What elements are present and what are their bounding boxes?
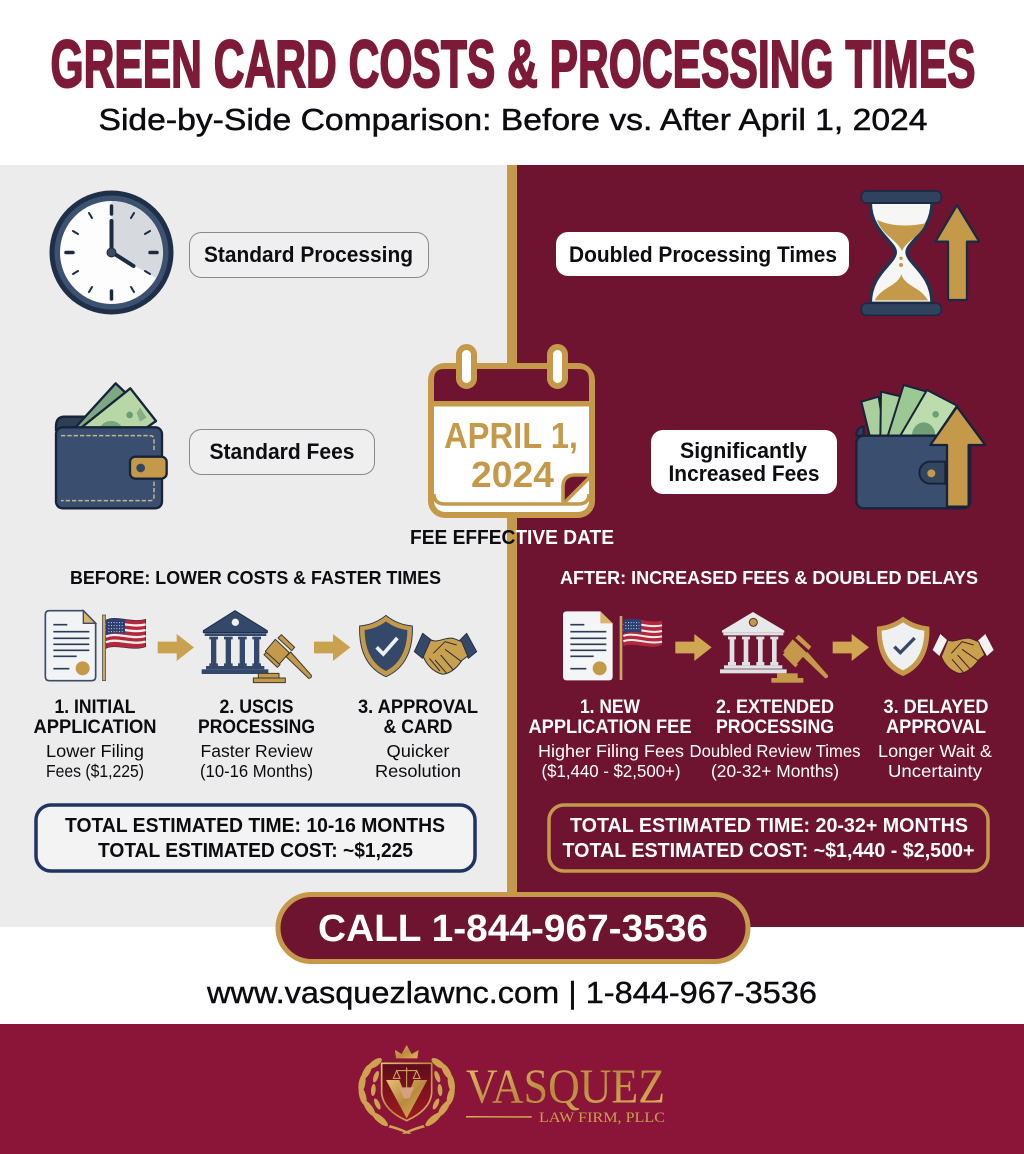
panel: after — [512, 165, 1024, 927]
after: step 3 text — [878, 696, 992, 781]
after totals box: TOTAL ESTIMATED COST: ~$1,440 - $2,500+ — [562, 840, 974, 862]
after totals box — [549, 805, 988, 871]
before: step 3 text — [358, 696, 478, 781]
after: step 1 text: APPLICATION FEE — [528, 716, 692, 738]
label: standard processing — [190, 232, 428, 278]
label: standard processing: Standard Processing — [204, 242, 413, 267]
before totals box: TOTAL ESTIMATED TIME: 10-16 MONTHS — [65, 815, 445, 837]
before: process icons — [45, 611, 477, 683]
icon: american flag — [620, 616, 662, 680]
before: step 3 text: Resolution — [375, 761, 461, 781]
before: step 2 text: Faster Review — [200, 741, 313, 761]
icon: shield with check — [877, 617, 929, 676]
icon: crown — [395, 1045, 419, 1058]
after: step 2 text: Doubled Review Times — [690, 741, 861, 761]
icon: handshake — [933, 634, 994, 673]
after: step 3 text: Uncertainty — [888, 761, 982, 781]
before totals box: TOTAL ESTIMATED COST: ~$1,225 — [98, 840, 413, 862]
label: significantly increased fees: Significantly — [680, 438, 808, 463]
after totals box: TOTAL ESTIMATED TIME: 20-32+ MONTHS — [570, 815, 968, 837]
heading: after: AFTER: INCREASED FEES & DOUBLED DELAYS — [560, 568, 978, 588]
before: step 2 text: PROCESSING — [198, 716, 315, 738]
footer band — [0, 1024, 1024, 1154]
before: step 1 text: 1. INITIAL — [54, 696, 136, 718]
before totals box — [36, 805, 475, 871]
icon: shield with V and scales — [382, 1063, 432, 1121]
icon: new application document — [563, 611, 613, 680]
contact line: www.vasquezlawnc.com | 1-844-967-3536 — [206, 975, 817, 1010]
subtitle: Side-by-Side Comparison: Before vs. After April 1, 2024 — [98, 102, 928, 137]
after: process icons — [563, 611, 994, 683]
before: step 2 text: (10-16 Months) — [200, 761, 313, 781]
icon: application document — [45, 611, 96, 681]
before: step 3 text: 3. APPROVAL — [358, 696, 478, 718]
after: step 2 text — [690, 696, 861, 781]
label: doubled processing times — [556, 232, 849, 276]
panel: before — [0, 165, 512, 927]
after: step 3 text: 3. DELAYED — [884, 696, 988, 718]
after: step 1 text: ($1,440 - $2,500+) — [542, 761, 680, 781]
center divider — [507, 165, 517, 900]
label: standard fees — [190, 430, 374, 474]
icon: clock — [50, 190, 174, 314]
icon: wallet with cash — [56, 383, 167, 508]
page curl — [563, 475, 590, 502]
date text: APRIL 1, — [444, 415, 578, 456]
label: significantly increased fees — [651, 430, 837, 494]
wordmark rule — [466, 1116, 532, 1118]
calendar: april 1, 2024: 2024 — [471, 454, 554, 495]
wordmark: VASQUEZ — [466, 1061, 665, 1114]
before: step 1 text: Lower Filing — [46, 741, 144, 761]
before: step 3 text: & CARD — [384, 716, 452, 738]
label: standard fees: Standard Fees — [210, 439, 354, 464]
after: step 1 text: 1. NEW — [580, 696, 641, 718]
label: significantly increased fees: Increased Fees — [668, 461, 820, 486]
icon: wallet with rising fees — [856, 385, 985, 508]
icon: courthouse and gavel — [720, 612, 828, 683]
logo — [357, 1045, 665, 1134]
after: step 1 text — [528, 696, 692, 781]
calendar: april 1, 2024 — [431, 347, 592, 515]
icon: courthouse and gavel — [202, 611, 311, 683]
after: step 3 text: Longer Wait & — [878, 741, 992, 761]
icon: handshake — [414, 633, 477, 674]
label: doubled processing times: Doubled Processing Times — [569, 242, 837, 267]
before: step 1 text: APPLICATION — [34, 716, 156, 738]
icon: american flag — [102, 615, 146, 681]
before: step 1 text — [34, 696, 156, 781]
icon: shield with check — [360, 615, 412, 677]
arrow: step 2 to 3 — [833, 634, 869, 661]
after: step 1 text: Higher Filing Fees — [538, 741, 684, 761]
arrow: step 1 to 2 — [675, 634, 712, 661]
before: step 1 text: Fees ($1,225) — [46, 761, 144, 781]
after: step 3 text: APPROVAL — [886, 716, 986, 738]
fee effective date caption: FEE EFFECTIVE DATE — [410, 526, 614, 549]
after: step 2 text: 2. EXTENDED — [716, 696, 834, 718]
before: step 2 text — [198, 696, 315, 781]
call button: CALL 1-844-967-3536 — [318, 908, 708, 950]
icon: laurel wreath — [357, 1056, 456, 1134]
before: step 3 text: Quicker — [386, 741, 450, 761]
after: step 2 text: PROCESSING — [716, 716, 834, 738]
icon: hourglass with arrow — [861, 191, 979, 315]
before: step 2 text: 2. USCIS — [220, 696, 294, 718]
arrow: step 1 to 2 — [158, 634, 194, 661]
after: step 2 text: (20-32+ Months) — [711, 761, 839, 781]
arrow: step 2 to 3 — [314, 634, 350, 661]
heading: before: BEFORE: LOWER COSTS & FASTER TIMES — [70, 568, 441, 588]
call button — [278, 894, 748, 962]
law firm tagline: LAW FIRM, PLLC — [539, 1110, 665, 1126]
